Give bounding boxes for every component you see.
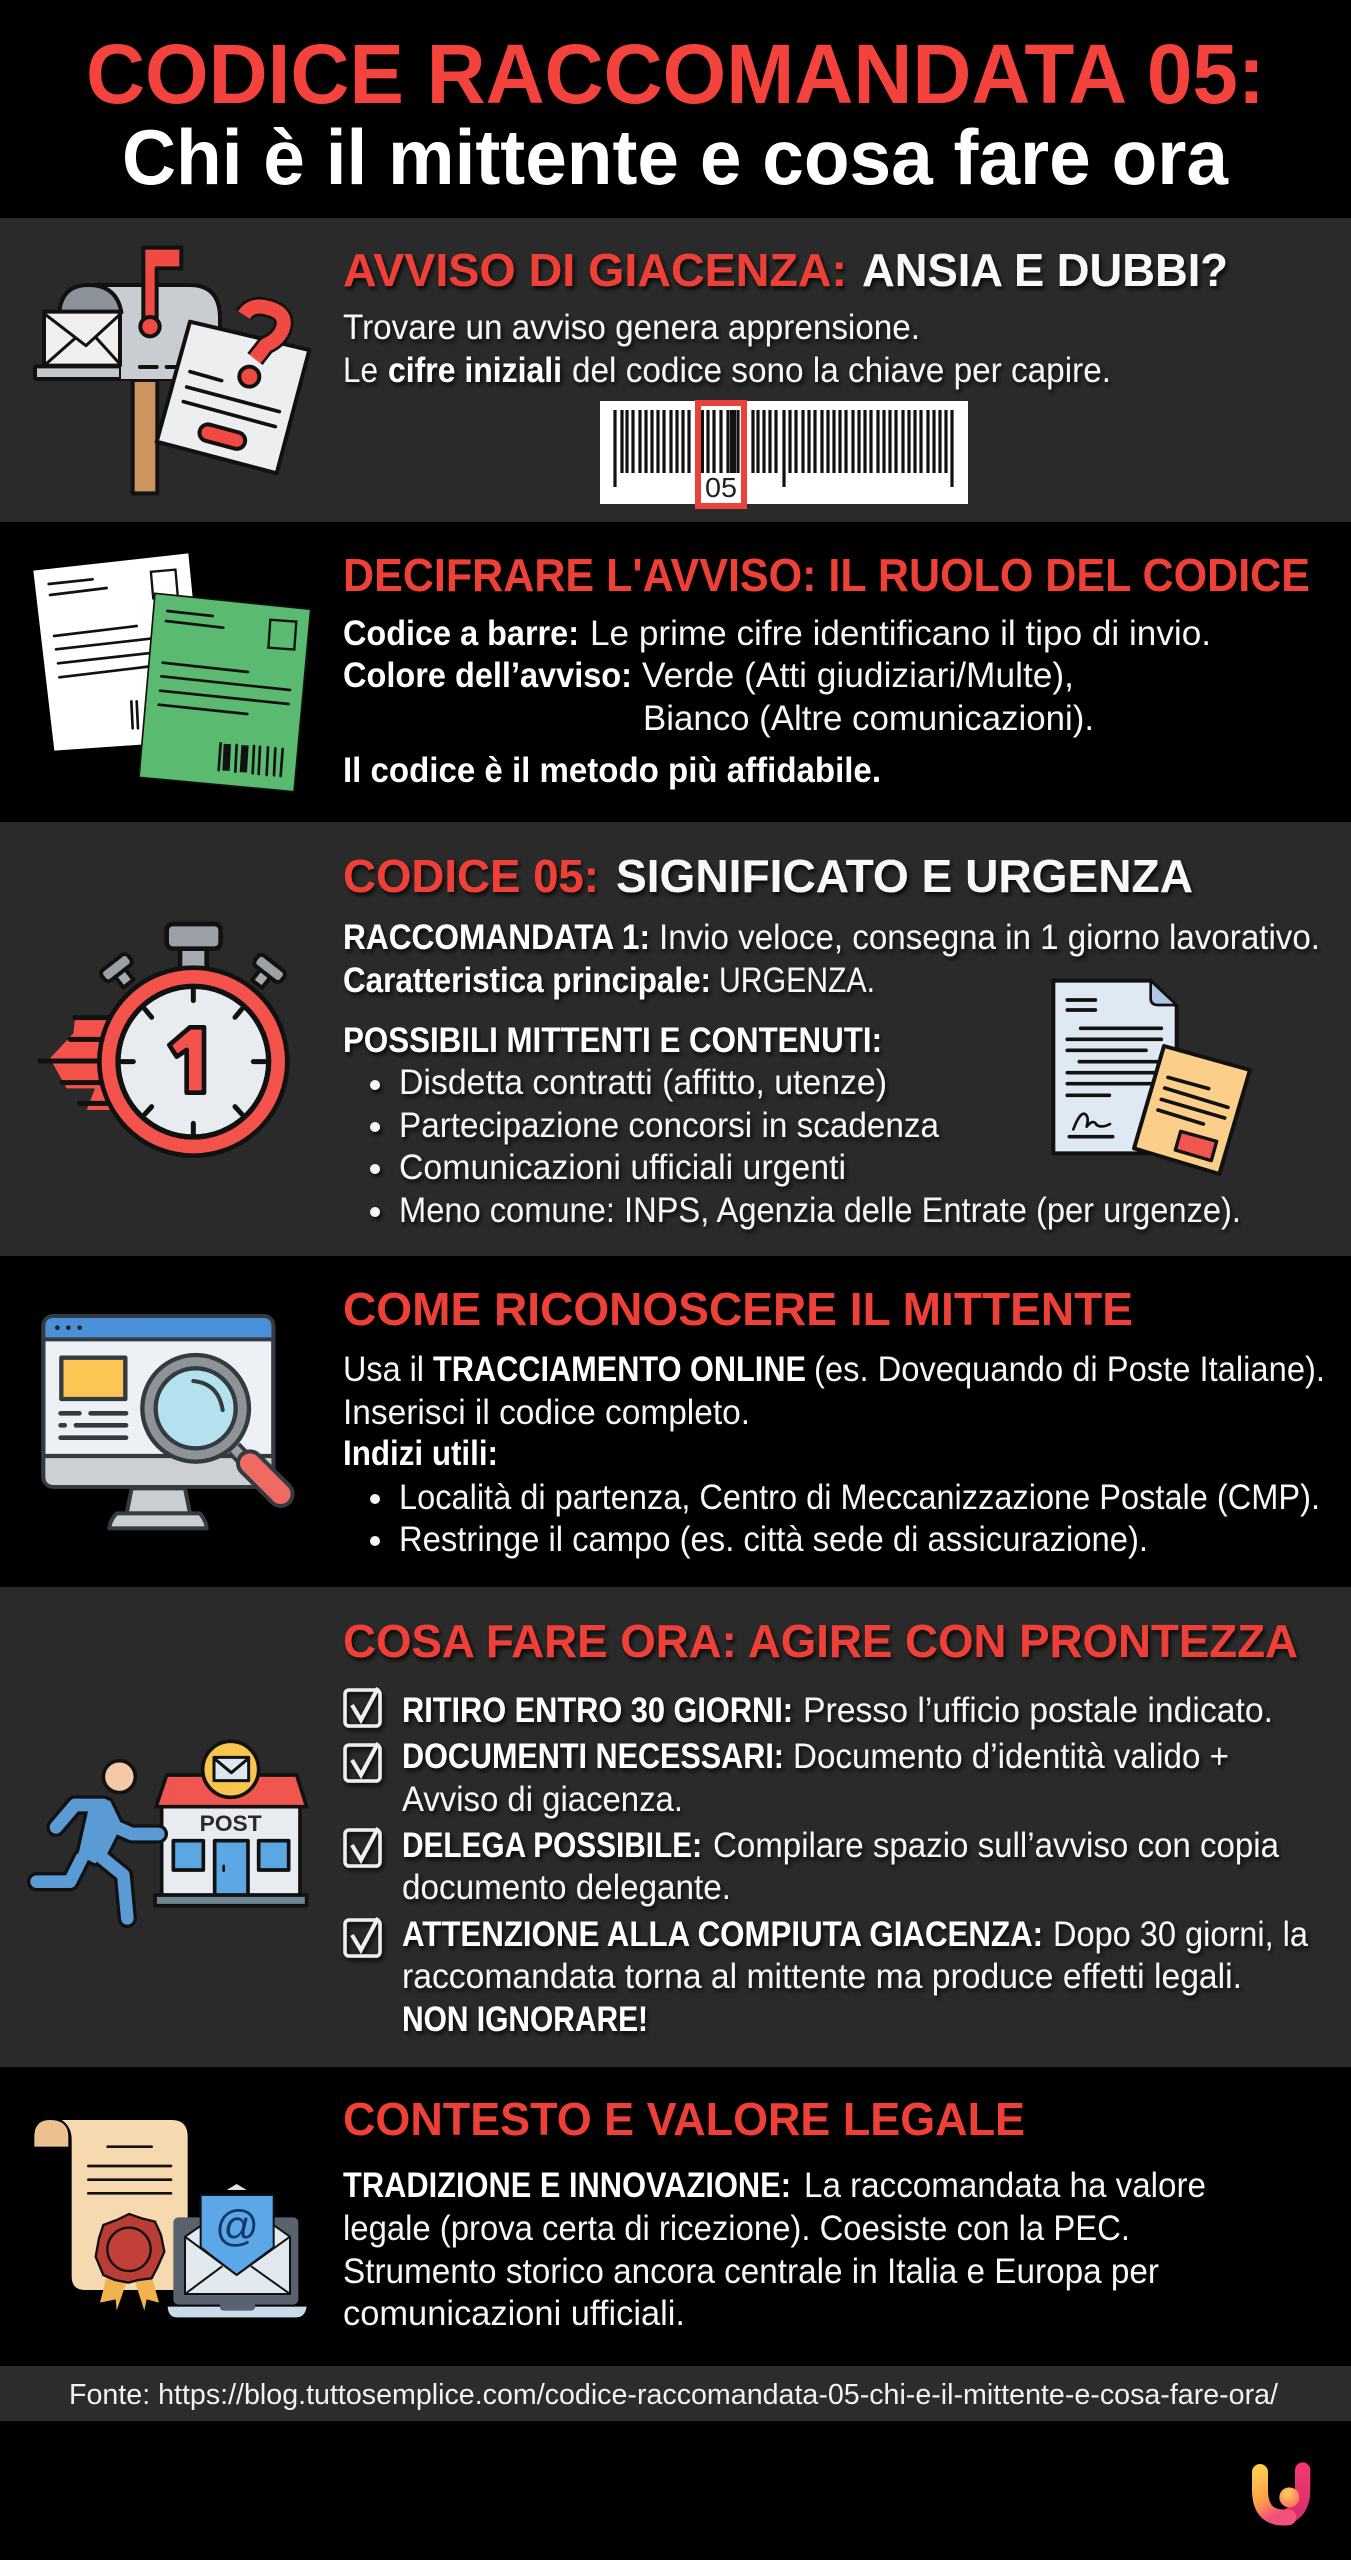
text block: Il codice è il metodo più affidabile. xyxy=(343,751,881,790)
text block: TRACCIAMENTO ONLINE xyxy=(433,1350,806,1389)
item: delega: documento delegante. xyxy=(402,1868,731,1907)
icon: white and green notices xyxy=(33,553,311,792)
panel: cosa fare ora xyxy=(0,1587,1351,2067)
icon: scroll, seal and email laptop: @ xyxy=(215,2203,259,2251)
text block: definition xyxy=(343,918,1320,1000)
text block xyxy=(343,308,1111,390)
text block: Verde (Atti giudiziari/Multe), xyxy=(642,656,1074,695)
text block: La raccomandata ha valore xyxy=(804,2166,1206,2205)
heading: CONTESTO E VALORE LEGALE xyxy=(343,2093,1025,2145)
text block: Usa il xyxy=(343,1350,424,1389)
item: documenti: Documento d’identità valido + xyxy=(793,1737,1229,1776)
text block: possible senders: POSSIBILI MITTENTI E CONTENUTI: xyxy=(343,1021,882,1060)
footer source bar: Fonte: https://blog.tuttosemplice.com/codice-raccomandata-05-chi-e-il-mittente-e-cosa-fare-ora/ xyxy=(69,2379,1279,2411)
text block: definition: Invio veloce, consegna in 1 giorno lavorativo. xyxy=(659,918,1320,957)
text block: legale (prova certa di ricezione). Coesiste con la PEC. xyxy=(343,2209,1130,2248)
heading xyxy=(343,244,1228,296)
text block: Inserisci il codice completo. xyxy=(343,1393,750,1432)
text block: possible senders: Comunicazioni ufficiali urgenti xyxy=(399,1148,846,1187)
heading: COSA FARE ORA: AGIRE CON PRONTEZZA xyxy=(343,1615,1298,1667)
icon: runner and post office: POST xyxy=(200,1811,262,1836)
text block: Le xyxy=(343,351,378,390)
item: ritiro xyxy=(345,1688,1273,1730)
item: compiuta giacenza: Dopo 30 giorni, la xyxy=(1053,1915,1308,1954)
text block: Indizi utili: xyxy=(343,1434,498,1473)
checklist xyxy=(345,1688,1308,2039)
icon: scroll, seal and email laptop xyxy=(34,2120,307,2317)
icon: documents xyxy=(1053,981,1250,1174)
text block: Colore dell’avviso: xyxy=(343,656,632,695)
barcode xyxy=(600,401,968,506)
heading: SIGNIFICATO E URGENZA xyxy=(616,850,1193,902)
text block: Strumento storico ancora centrale in Italia e Europa per xyxy=(343,2252,1159,2291)
text block: definition: RACCOMANDATA 1: xyxy=(343,918,650,957)
item: compiuta giacenza: raccomandata torna al mittente ma produce effetti legali. xyxy=(402,1957,1242,1996)
text block: cifre iniziali xyxy=(388,351,562,390)
footer source bar xyxy=(0,2366,1351,2421)
text block: possible senders: Partecipazione concorsi in scadenza xyxy=(399,1106,939,1145)
text block: definition: Caratteristica principale: xyxy=(343,961,711,1000)
text block: definition: URGENZA. xyxy=(719,961,875,1000)
panel: come riconoscere il mittente xyxy=(0,1256,1351,1587)
text block xyxy=(343,2166,1206,2333)
heading: COME RICONOSCERE IL MITTENTE xyxy=(343,1283,1133,1335)
logo xyxy=(1260,2470,1303,2518)
panel: codice 05 xyxy=(0,822,1351,1256)
text block: Bianco (Altre comunicazioni). xyxy=(643,699,1094,738)
text block: Trovare un avviso genera apprensione. xyxy=(343,308,920,347)
text block: del codice sono la chiave per capire. xyxy=(572,351,1111,390)
icon: stopwatch xyxy=(40,924,287,1156)
text block: comunicazioni ufficiali. xyxy=(343,2294,685,2333)
barcode: 05 xyxy=(705,472,737,503)
item: ritiro: Presso l’ufficio postale indicato. xyxy=(803,1691,1273,1730)
item: compiuta giacenza: NON IGNORARE! xyxy=(402,2000,648,2039)
icon: mailbox and notice xyxy=(35,248,309,493)
title: Chi è il mittente e cosa fare ora xyxy=(122,113,1229,201)
heading: DECIFRARE L'AVVISO: IL RUOLO DEL CODICE xyxy=(343,549,1310,601)
title xyxy=(86,27,1265,201)
item: documenti: Avviso di giacenza. xyxy=(402,1780,683,1819)
text block: Restringe il campo (es. città sede di assicurazione). xyxy=(399,1520,1148,1559)
icon: runner and post office xyxy=(37,1741,307,1918)
item: documenti xyxy=(345,1737,1229,1819)
heading: AVVISO DI GIACENZA: xyxy=(343,244,847,296)
text block: possible senders: Disdetta contratti (affitto, utenze) xyxy=(399,1063,887,1102)
icon: monitor with magnifier xyxy=(43,1316,281,1528)
item: documenti: DOCUMENTI NECESSARI: xyxy=(402,1737,784,1776)
item: delega: DELEGA POSSIBILE: xyxy=(402,1826,702,1865)
item: ritiro: RITIRO ENTRO 30 GIORNI: xyxy=(402,1691,793,1730)
item: compiuta giacenza xyxy=(345,1915,1308,2039)
heading: ANSIA E DUBBI? xyxy=(862,244,1228,296)
text block xyxy=(343,614,1211,790)
text block: Codice a barre: xyxy=(343,614,579,653)
text block: TRADIZIONE E INNOVAZIONE: xyxy=(343,2166,791,2205)
text block: possible senders: Meno comune: INPS, Agenzia delle Entrate (per urgenze). xyxy=(399,1191,1241,1230)
text block xyxy=(343,1350,1325,1559)
heading: CODICE 05: xyxy=(343,850,599,902)
panel: avviso di giacenza xyxy=(0,218,1351,522)
panel: decifrare l'avviso xyxy=(0,522,1351,822)
item: delega xyxy=(345,1826,1280,1907)
text block: possible senders xyxy=(343,1021,1241,1230)
heading xyxy=(343,850,1193,902)
text block: Le prime cifre identificano il tipo di invio. xyxy=(590,614,1211,653)
text block: (es. Dovequando di Poste Italiane). xyxy=(814,1350,1325,1389)
item: delega: Compilare spazio sull’avviso con copia xyxy=(713,1826,1280,1865)
panel: contesto e valore legale xyxy=(0,2067,1351,2366)
title: CODICE RACCOMANDATA 05: xyxy=(86,27,1265,121)
item: compiuta giacenza: ATTENZIONE ALLA COMPIUTA GIACENZA: xyxy=(402,1915,1043,1954)
